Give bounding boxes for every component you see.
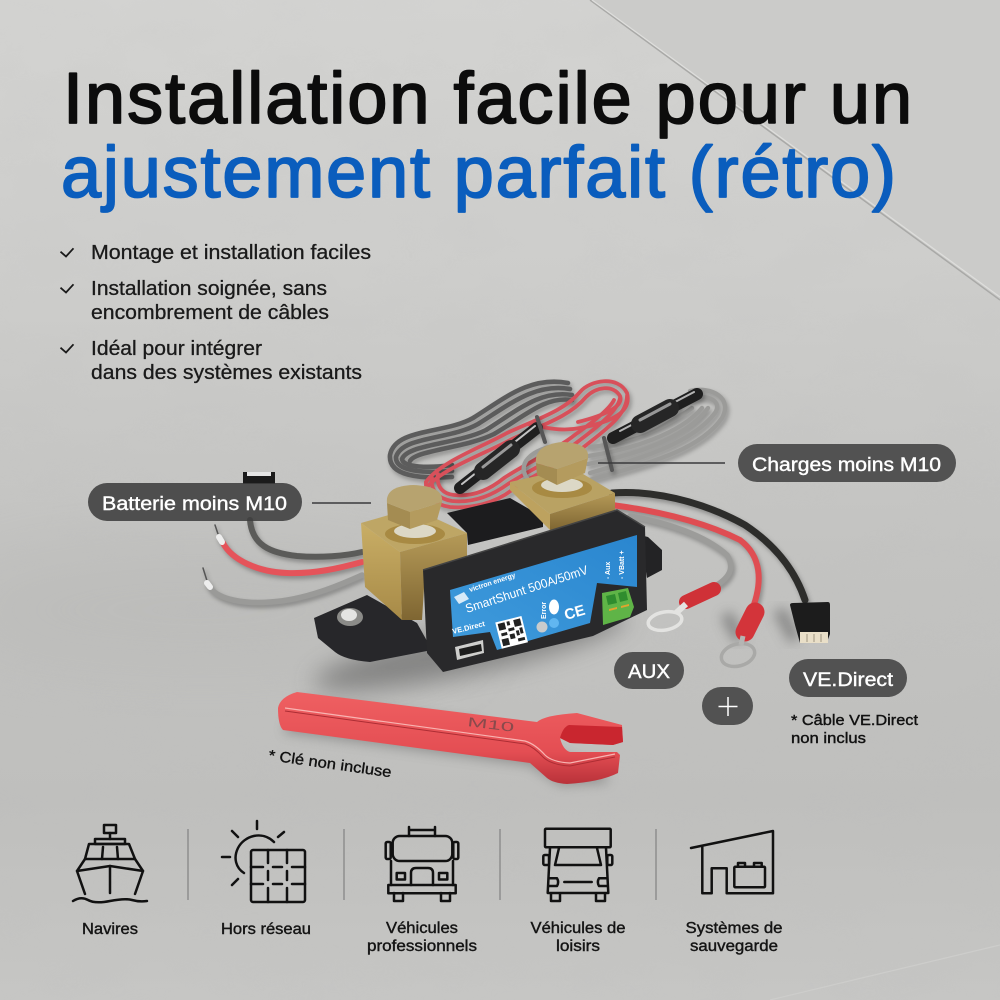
callout: battery negative: Batterie moins M10 xyxy=(102,494,287,515)
jaw interior xyxy=(560,725,623,745)
VE.Direct port xyxy=(455,640,484,660)
title xyxy=(61,59,912,213)
cable loop: red xyxy=(426,381,628,507)
icon: solar panel and sun xyxy=(222,821,305,902)
applications row xyxy=(73,821,782,955)
leader lines xyxy=(312,463,725,503)
port label: VE.Direct xyxy=(451,619,486,636)
shadows xyxy=(309,593,795,707)
icon: backup building with battery xyxy=(691,831,773,893)
bolt: right xyxy=(532,442,592,498)
note: VE.Direct cable not included: * Câble VE.Direct xyxy=(791,712,919,729)
benefit 2: Installation soignée, sans xyxy=(91,278,327,300)
label: professional vehicles: professionnels xyxy=(367,938,477,955)
benefits checklist xyxy=(60,242,371,384)
wires: right side xyxy=(612,492,805,615)
ring terminal: AUX xyxy=(647,589,714,633)
logo xyxy=(454,592,469,604)
wrench xyxy=(278,692,623,785)
callout: load negative: Charges moins M10 xyxy=(752,455,941,476)
icon: check xyxy=(60,248,74,256)
benefit 3: dans des systèmes existants xyxy=(91,362,362,384)
title: ajustement parfait (rétro) xyxy=(61,133,896,213)
note: VE.Direct cable not included: non inclus xyxy=(791,730,866,747)
label: backup systems xyxy=(686,920,782,955)
icon: check xyxy=(60,284,74,292)
QR code xyxy=(495,616,528,649)
LED: grey xyxy=(536,622,548,632)
brand text: victron energy xyxy=(468,572,517,594)
benefit 2 xyxy=(91,278,329,324)
cable loop: dark grey xyxy=(390,382,572,478)
note: VE.Direct cable not included xyxy=(791,712,919,747)
label: off-grid: Hors réseau xyxy=(221,921,311,938)
busbar xyxy=(447,498,543,545)
note: wrench not included: * Clé non incluse xyxy=(267,747,393,781)
cable loop: light grey xyxy=(524,390,725,482)
ring terminal: positive xyxy=(719,612,757,670)
shunt housing xyxy=(423,510,647,672)
terminal block: right xyxy=(510,468,615,530)
icon: ship xyxy=(73,825,147,902)
label: backup systems: Systèmes de xyxy=(686,920,782,937)
benefit 1: Montage et installation faciles xyxy=(91,242,371,264)
callout: VE.Direct: VE.Direct xyxy=(803,670,894,691)
callout: plus xyxy=(702,687,753,725)
bolt: left xyxy=(385,485,445,544)
label: leisure vehicles: Véhicules de xyxy=(530,920,626,937)
callout: AUX xyxy=(614,652,684,689)
terminal labels: - VBatt + xyxy=(619,550,626,579)
LED: blue xyxy=(549,618,559,628)
edge highlight xyxy=(285,708,615,763)
CE mark: CE xyxy=(562,602,587,624)
label: backup systems: sauvegarde xyxy=(690,938,778,955)
foot bracket xyxy=(314,535,662,662)
screw xyxy=(337,608,363,626)
icon: truck xyxy=(386,827,458,901)
title: Installation facile pour un xyxy=(63,59,912,139)
fuse holders xyxy=(460,392,697,488)
model name: SmartShunt 500A/50mV xyxy=(464,563,590,616)
callout: load negative xyxy=(738,444,956,482)
VE.Direct connector: right xyxy=(790,602,830,643)
label: leisure vehicles: loisirs xyxy=(556,938,600,955)
terminal labels: - Aux xyxy=(605,562,612,579)
terminal block: left xyxy=(361,508,467,620)
wires: left side xyxy=(203,520,362,602)
callout: VE.Direct xyxy=(789,659,907,697)
label: leisure vehicles xyxy=(530,920,626,955)
label: ships: Navires xyxy=(82,921,138,938)
callout: battery negative xyxy=(88,483,302,521)
VE.Direct connector: left xyxy=(243,472,275,484)
bluetooth badge xyxy=(549,600,559,614)
product: SmartShunt with cables xyxy=(203,381,830,707)
benefit 3 xyxy=(91,338,362,384)
label: professional vehicles: Véhicules xyxy=(386,920,458,937)
benefit 2: encombrement de câbles xyxy=(91,302,329,324)
status text: Error xyxy=(541,602,548,619)
icon: camper xyxy=(543,829,612,901)
terminal labels xyxy=(605,550,626,579)
icon: check xyxy=(60,344,74,352)
label: professional vehicles xyxy=(367,920,477,955)
callout: AUX: AUX xyxy=(628,662,670,683)
wrench size marking: M10 xyxy=(467,714,515,735)
benefit 3: Idéal pour intégrer xyxy=(91,338,262,360)
green connector xyxy=(602,588,634,625)
blue label panel xyxy=(450,535,637,650)
